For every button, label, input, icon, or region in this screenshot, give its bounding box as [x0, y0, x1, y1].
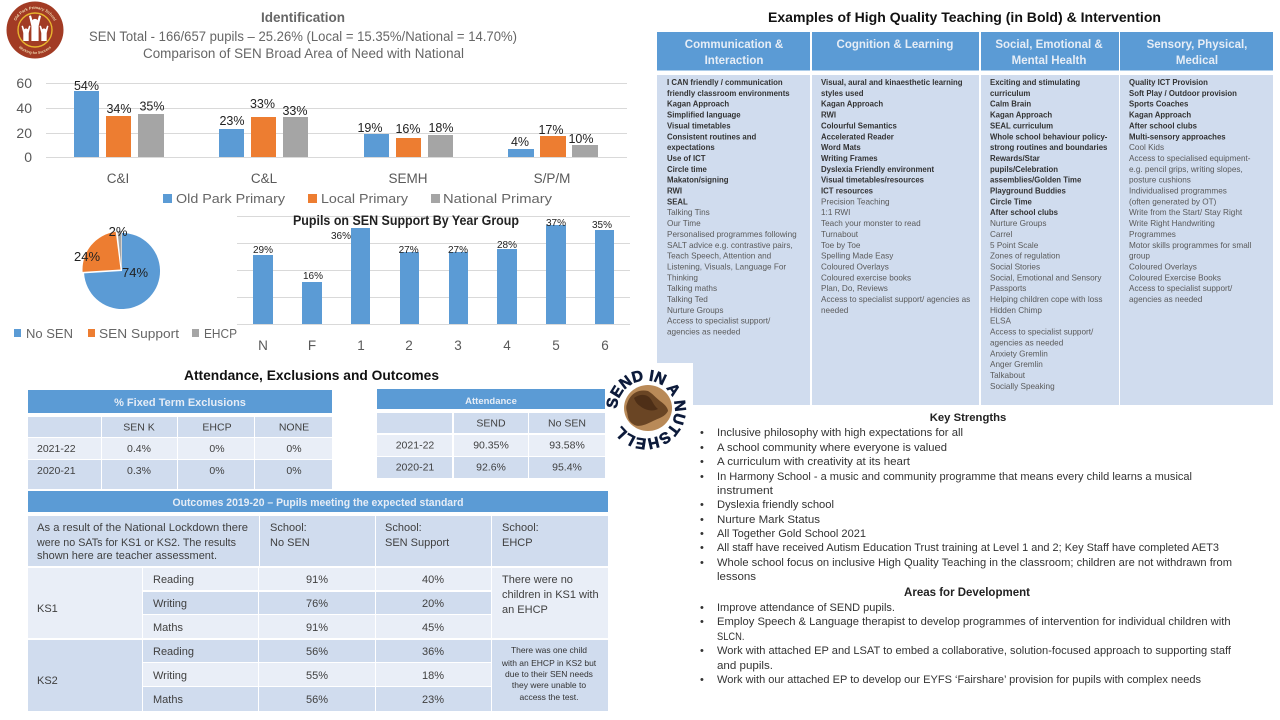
column: social emotional and mental health: Talkabout: [990, 371, 1026, 380]
list: strengths: instrument: [717, 485, 773, 497]
column: communication and interaction: agencies as needed: [667, 328, 741, 337]
column: cognition and learning: Accelerated Reader: [821, 132, 894, 141]
bar chart: pupils on SEN support by year group: 27%: [448, 245, 468, 256]
list: strengths: [700, 427, 1232, 583]
table: outcomes 2019-20: 23%: [422, 694, 444, 706]
icon: school logo: [6, 2, 64, 58]
column: cognition and learning: Turnabout: [821, 230, 859, 239]
bar chart: SEN broad area of need: 33%: [250, 97, 275, 111]
bar chart: pupils on SEN support by year group: N: [258, 338, 268, 353]
list: strengths: lessons: [717, 571, 757, 583]
list: strengths: •: [700, 471, 704, 483]
table: outcomes 2019-20: There were no: [502, 574, 573, 586]
table: attendance: Attendance: [465, 396, 517, 407]
column: social emotional and mental health: Socially Speaking: [990, 382, 1055, 391]
column: sensory physical and medical: Write from the Start/ Stay Right: [1129, 208, 1243, 217]
list: development areas: Work with our attached EP to develop our EYFS ‘Fairshare’ provision for pupils with complex needs: [717, 674, 1201, 686]
column: cognition and learning: Coloured Overlays: [821, 262, 889, 271]
table: outcomes 2019-20: 91%: [306, 574, 328, 586]
list: development areas: Improve attendance of SEND pupils.: [717, 602, 895, 614]
column: communication and interaction: expectations: [667, 143, 715, 152]
column: cognition and learning: Dyslexia Friendly environment: [821, 165, 934, 174]
column: cognition and learning: Word Mats: [821, 143, 861, 152]
list: strengths: •: [700, 456, 704, 468]
heading: high quality teaching: Examples of High Quality Teaching (in Bold) & Intervention: [768, 9, 1161, 25]
table: outcomes 2019-20: SEN Support: [385, 537, 449, 549]
column: sensory physical and medical: posture cushions: [1129, 176, 1191, 185]
column: social emotional and mental health: curriculum: [990, 89, 1030, 98]
table: outcomes 2019-20: 55%: [306, 670, 328, 682]
bar chart: pupils on SEN support by year group: 36%: [331, 231, 351, 242]
bar chart: SEN broad area of need: 60: [16, 75, 32, 91]
list: development areas: and pupils.: [717, 660, 773, 672]
list: development areas: •: [700, 645, 704, 657]
bar chart: pupils on SEN support by year group: F: [308, 338, 316, 353]
column: social emotional and mental health: Whole school behaviour policy-: [990, 132, 1108, 141]
chart legend: Old Park Primary: [176, 191, 286, 206]
table: attendance: 92.6%: [476, 462, 506, 474]
table: outcomes 2019-20: 18%: [422, 670, 444, 682]
bar chart: SEN broad area of need: 20: [16, 125, 32, 141]
heading: identification: Comparison of SEN Broad Area of Need with National: [143, 46, 464, 61]
bar chart: pupils on SEN support by year group: 37%: [546, 218, 566, 229]
bar chart: SEN broad area of need: 17%: [538, 123, 564, 137]
column: sensory physical and medical: Cool Kids: [1129, 143, 1164, 152]
column: communication and interaction: Thinking: [667, 273, 698, 282]
chart legend: National Primary: [443, 191, 553, 206]
column: social emotional and mental health: Rewards/Star: [990, 154, 1040, 163]
table: outcomes 2019-20: 56%: [306, 694, 328, 706]
bar chart: SEN broad area of need: 18%: [428, 121, 454, 135]
table: outcomes 2019-20: Writing: [153, 670, 187, 682]
table: outcomes 2019-20: children in KS1 with: [502, 589, 599, 601]
pie legend: [14, 326, 237, 341]
pie legend: No SEN: [26, 326, 73, 341]
column: sensory physical and medical: e.g. pencil grips, writing slopes,: [1129, 165, 1243, 174]
column headers: Communication &: [685, 39, 783, 51]
column: communication and interaction: Access to specialist support/: [667, 317, 771, 326]
bar chart: SEN broad area of need: SEMH: [388, 171, 428, 186]
list: strengths: •: [700, 499, 704, 511]
column headers: Cognition & Learning: [837, 39, 953, 51]
list: strengths: •: [700, 528, 704, 540]
table: attendance: 2020-21: [396, 462, 434, 474]
table: outcomes 2019-20: There was one child: [511, 645, 587, 655]
table: attendance: 90.35%: [473, 440, 509, 452]
table: outcomes 2019-20: Maths: [153, 622, 183, 634]
column: cognition and learning: Toe by Toe: [821, 241, 861, 250]
table: outcomes 2019-20: School:: [270, 522, 307, 534]
column: cognition and learning: Spelling Made Easy: [821, 252, 894, 261]
bar chart: SEN broad area of need: S/P/M: [534, 171, 570, 186]
pie chart: SEN proportion: [14, 224, 237, 341]
table: outcomes 2019-20: 76%: [306, 598, 328, 610]
icon: school logo: Old Park Primary School: [14, 6, 56, 21]
icon: send in a nutshell badge: SEND IN A NUTSHELL: [606, 370, 686, 450]
bar chart: pupils on SEN support by year group: 35%: [592, 220, 612, 231]
table: outcomes 2019-20: [28, 491, 608, 711]
heading: identification: SEN Total - 166/657 pupils – 25.26% (Local = 15.35%/National = 14.70%): [89, 29, 517, 44]
list: strengths: Dyslexia friendly school: [717, 499, 834, 511]
bar chart: SEN broad area of need: 0: [24, 149, 32, 165]
list: development areas: •: [700, 616, 704, 628]
column: sensory physical and medical: Programmes: [1129, 230, 1176, 239]
column: communication and interaction: Use of ICT: [667, 154, 706, 163]
bar chart: SEN broad area of need: C&L: [251, 171, 278, 186]
column: sensory physical and medical: Access to specialist support/: [1129, 284, 1233, 293]
list: strengths: Inclusive philosophy with high expectations for all: [717, 427, 963, 439]
column: cognition and learning: 1:1 RWI: [821, 208, 850, 217]
table: attendance: [377, 389, 605, 478]
column: sensory physical and medical: group: [1129, 252, 1150, 261]
table: attendance: 2021-22: [396, 440, 434, 452]
chart legend: [163, 191, 553, 206]
column: social emotional and mental health: Carrel: [990, 230, 1012, 239]
list: strengths: •: [700, 514, 704, 526]
column: social emotional and mental health: Passports: [990, 284, 1026, 293]
column: communication and interaction: Simplified language: [667, 111, 741, 120]
table: outcomes 2019-20: As a result of the National Lockdown there: [37, 522, 248, 534]
table: outcomes 2019-20: School:: [385, 522, 422, 534]
column: cognition and learning: RWI: [821, 111, 836, 120]
table: fixed term exclusions: SEN K: [123, 422, 155, 434]
list: development areas: SLCN.: [717, 631, 744, 643]
list: development areas: [700, 602, 1232, 686]
table: outcomes 2019-20: Reading: [153, 646, 194, 658]
table: outcomes 2019-20: 45%: [422, 622, 444, 634]
column: cognition and learning: Teach your monster to read: [821, 219, 921, 228]
bar chart: SEN broad area of need: 54%: [74, 79, 99, 93]
pie legend: SEN Support: [99, 326, 179, 341]
bar chart: SEN broad area of need: 33%: [282, 104, 308, 118]
table: outcomes 2019-20: 20%: [422, 598, 444, 610]
table: outcomes 2019-20: they were unable to: [512, 680, 586, 690]
column: cognition and learning: Coloured exercise books: [821, 273, 911, 282]
list: strengths: •: [700, 557, 704, 569]
pie chart: SEN proportion: 24%: [74, 249, 100, 264]
table: fixed term exclusions: % Fixed Term Exclusions: [114, 397, 246, 409]
list: strengths: Nurture Mark Status: [717, 514, 821, 526]
column: sensory physical and medical: Sports Coaches: [1129, 100, 1189, 109]
column: cognition and learning: Writing Frames: [821, 154, 878, 163]
bar chart: SEN broad area of need: 35%: [139, 100, 165, 114]
list: strengths: •: [700, 442, 704, 454]
column: sensory physical and medical: After school clubs: [1129, 121, 1198, 130]
column headers: [657, 32, 1273, 70]
column: sensory physical and medical: Individualised programmes: [1129, 186, 1227, 196]
column: social emotional and mental health: Anger Gremlin: [990, 360, 1043, 369]
column: social emotional and mental health: strong routines and boundaries: [990, 143, 1108, 152]
column: cognition and learning: Access to specialist support/ agencies as: [821, 295, 970, 304]
list: strengths: A school community where everyone is valued: [717, 442, 947, 454]
bar chart: SEN broad area of need: 40: [16, 100, 32, 116]
table: outcomes 2019-20: Reading: [153, 574, 194, 586]
bar chart: pupils on SEN support by year group: 5: [552, 338, 560, 353]
column: cognition and learning: styles used: [821, 89, 864, 98]
table: attendance: No SEN: [548, 418, 586, 430]
column: communication and interaction: RWI: [667, 186, 682, 196]
column: communication and interaction: Circle time: [667, 165, 708, 174]
table: outcomes 2019-20: 56%: [306, 646, 328, 658]
column: communication and interaction: Talking Ted: [667, 295, 708, 304]
column: sensory physical and medical: agencies as needed: [1129, 295, 1203, 304]
column headers: Social, Emotional &: [995, 39, 1103, 51]
column headers: Interaction: [705, 55, 763, 67]
bar chart: pupils on SEN support by year group: 6: [601, 338, 609, 353]
table: outcomes 2019-20: access the test.: [519, 692, 579, 702]
column: cognition and learning: needed: [821, 306, 849, 315]
column: social emotional and mental health: Helping children cope with loss: [990, 295, 1102, 304]
column: communication and interaction: SEAL: [667, 197, 688, 206]
column: social emotional and mental health: Access to specialist support/: [990, 328, 1094, 337]
column: communication and interaction: Visual timetables: [667, 121, 731, 130]
column: social emotional and mental health: pupils/Celebration: [990, 165, 1058, 174]
table: fixed term exclusions: 0%: [286, 443, 302, 455]
table: outcomes 2019-20: School:: [502, 522, 539, 534]
icon: school logo: Working for Success: [19, 46, 51, 54]
bar chart: pupils on SEN support by year group: Pupils on SEN Support By Year Group: [293, 213, 519, 228]
table: outcomes 2019-20: due to their SEN needs: [505, 669, 593, 679]
list: strengths: In Harmony School - a music and community programme that means every child learns a musical: [717, 471, 1192, 483]
column headers: Medical: [1176, 55, 1218, 67]
table: outcomes 2019-20: EHCP: [502, 537, 533, 549]
table: fixed term exclusions: 0.4%: [127, 443, 151, 455]
column: social emotional and mental health: agencies as needed: [990, 338, 1064, 347]
table: outcomes 2019-20: 40%: [422, 574, 444, 586]
column: communication and interaction: Talking Tins: [667, 208, 710, 217]
column: social emotional and mental health: Anxiety Gremlin: [990, 349, 1048, 358]
column: sensory physical and medical: Kagan Approach: [1129, 111, 1191, 120]
table: attendance: 95.4%: [552, 462, 582, 474]
table: fixed term exclusions: 0%: [209, 443, 225, 455]
table: outcomes 2019-20: Outcomes 2019-20 – Pupils meeting the expected standard: [172, 497, 464, 509]
table: fixed term exclusions: EHCP: [202, 422, 232, 434]
table: fixed term exclusions: 2021-22: [37, 443, 76, 455]
table: fixed term exclusions: 2020-21: [37, 465, 76, 477]
column: cognition and learning: Visual, aural and kinaesthetic learning: [821, 78, 963, 87]
list: strengths: Whole school focus on inclusive High Quality Teaching in the classroom; children are not withdrawn from: [717, 557, 1232, 569]
table: attendance: SEND: [476, 418, 506, 430]
table: attendance: 93.58%: [549, 440, 585, 452]
column: social emotional and mental health: Zones of regulation: [990, 252, 1061, 261]
chart legend: Local Primary: [321, 191, 409, 206]
column: social emotional and mental health: Playground Buddies: [990, 186, 1066, 196]
column: communication and interaction: Listening, Visuals, Language For: [667, 262, 786, 271]
list: development areas: Employ Speech & Language therapist to develop programmes of intervention for individual children with: [717, 616, 1231, 628]
panel: key strengths: Key Strengths: [930, 412, 1006, 424]
column headers: Sensory, Physical,: [1147, 39, 1247, 51]
panel: teaching table: [657, 32, 1273, 405]
bar chart: SEN broad area of need: 23%: [219, 114, 245, 128]
column: sensory physical and medical: (often generated by OT): [1129, 197, 1217, 206]
column: communication and interaction: I CAN friendly / communication: [667, 78, 783, 87]
list: strengths: All Together Gold School 2021: [717, 528, 866, 540]
list: development areas: Work with attached EP and LSAT to embed a collaborative, solution-focused approach to supporting staff: [717, 645, 1232, 657]
heading: attendance exclusions outcomes: Attendance, Exclusions and Outcomes: [184, 368, 439, 383]
column: social emotional and mental health: Nurture Groups: [990, 219, 1046, 228]
bar chart: pupils on SEN support by year group: 3: [454, 338, 462, 353]
table: fixed term exclusions: 0.3%: [127, 465, 151, 477]
column: sensory physical and medical: Write Right Handwriting: [1129, 219, 1215, 228]
column: cognition and learning: ICT resources: [821, 186, 874, 196]
column: communication and interaction: Talking maths: [667, 284, 717, 293]
column: social emotional and mental health: Social, Emotional and Sensory: [990, 273, 1102, 282]
bar chart: SEN broad area of need: 34%: [106, 102, 132, 116]
column: social emotional and mental health: 5 Point Scale: [990, 241, 1039, 250]
pie chart: SEN proportion: 74%: [122, 265, 148, 280]
table: outcomes 2019-20: an EHCP: [502, 604, 548, 616]
bar chart: SEN broad area of need: [16, 75, 627, 206]
bar chart: pupils on SEN support by year group: 2: [405, 338, 413, 353]
bar chart: SEN broad area of need: 19%: [357, 121, 383, 135]
bar chart: pupils on SEN support by year group: 29%: [253, 245, 273, 256]
list: strengths: •: [700, 427, 704, 439]
table: outcomes 2019-20: Writing: [153, 598, 187, 610]
bar chart: pupils on SEN support by year group: [237, 213, 630, 353]
column: communication and interaction: Teach Speech, Attention and: [667, 252, 772, 261]
column: cognition and learning: Colourful Semantics: [821, 121, 897, 130]
panel: areas for development: Areas for Development: [904, 587, 1030, 599]
table: fixed term exclusions: 0%: [286, 465, 302, 477]
column: cognition and learning: Kagan Approach: [821, 100, 883, 109]
column: social emotional and mental health: ELSA: [990, 317, 1011, 326]
table: outcomes 2019-20: 91%: [306, 622, 328, 634]
bar chart: pupils on SEN support by year group: 28%: [497, 240, 517, 251]
table: outcomes 2019-20: with an EHCP in KS2 but: [501, 658, 597, 668]
list: strengths: All staff have received Autism Education Trust training at Level 1 and 2; Key Staff have completed AET3: [717, 542, 1219, 554]
column: sensory physical and medical: Motor skills programmes for small: [1129, 241, 1252, 250]
list: strengths: •: [700, 542, 704, 554]
pie legend: EHCP: [204, 326, 237, 341]
bar chart: SEN broad area of need: C&I: [107, 171, 129, 186]
column: communication and interaction: Consistent routines and: [667, 132, 756, 141]
column: cognition and learning: Precision Teaching: [821, 197, 890, 206]
column: social emotional and mental health: Circle Time: [990, 197, 1033, 206]
column: social emotional and mental health: SEAL curriculum: [990, 121, 1053, 130]
table: fixed term exclusions: [28, 390, 332, 489]
column: communication and interaction: friendly classroom environments: [667, 89, 790, 98]
column: social emotional and mental health: After school clubs: [990, 208, 1059, 217]
column: communication and interaction: Makaton/signing: [667, 176, 729, 185]
column: social emotional and mental health: Calm Brain: [990, 100, 1031, 109]
bar chart: SEN broad area of need: 10%: [568, 132, 594, 146]
table: outcomes 2019-20: KS2: [37, 675, 58, 687]
column: communication and interaction: Kagan Approach: [667, 100, 729, 109]
column: communication and interaction: Nurture Groups: [667, 306, 723, 315]
column: social emotional and mental health: assemblies/Golden Time: [990, 176, 1082, 185]
list: development areas: •: [700, 674, 704, 686]
column: cognition and learning: Plan, Do, Reviews: [821, 284, 888, 293]
table: outcomes 2019-20: No SEN: [270, 537, 310, 549]
panel: areas for development: [700, 587, 1232, 686]
column: communication and interaction: Our Time: [667, 219, 701, 228]
column: sensory physical and medical: Soft Play / Outdoor provision: [1129, 89, 1237, 98]
table: outcomes 2019-20: Maths: [153, 694, 183, 706]
column: communication and interaction: Personalised programmes following: [667, 230, 797, 239]
table: fixed term exclusions: NONE: [279, 422, 309, 434]
table: outcomes 2019-20: shown here are teacher assessment.: [37, 550, 217, 562]
bar chart: pupils on SEN support by year group: 4: [503, 338, 511, 353]
column: social emotional and mental health: Exciting and stimulating: [990, 78, 1080, 87]
table: outcomes 2019-20: 36%: [422, 646, 444, 658]
column: sensory physical and medical: Multi-sensory approaches: [1129, 132, 1226, 141]
pie chart: SEN proportion: 2%: [109, 224, 128, 239]
heading: identification: [89, 10, 517, 61]
column: sensory physical and medical: Coloured Overlays: [1129, 262, 1197, 271]
column headers: Mental Health: [1012, 55, 1086, 67]
column: cognition and learning: Visual timetables/resources: [821, 176, 925, 185]
column: communication and interaction: SALT advice e.g. contrastive pairs,: [667, 241, 793, 250]
table: outcomes 2019-20: KS1: [37, 603, 58, 615]
heading: identification: Identification: [261, 10, 345, 25]
list: strengths: A curriculum with creativity at its heart: [717, 456, 910, 468]
table: outcomes 2019-20: were no SATs for KS1 or KS2. The results: [36, 537, 236, 549]
column: social emotional and mental health: Hidden Chimp: [990, 306, 1042, 315]
bar chart: pupils on SEN support by year group: 27%: [399, 245, 419, 256]
list: development areas: •: [700, 602, 704, 614]
panel: key strengths: [700, 412, 1232, 583]
bar chart: pupils on SEN support by year group: 16%: [303, 271, 323, 282]
bar chart: SEN broad area of need: 4%: [511, 135, 529, 149]
bar chart: pupils on SEN support by year group: 1: [357, 338, 365, 353]
column: social emotional and mental health: Social Stories: [990, 262, 1040, 271]
table: fixed term exclusions: 0%: [209, 465, 225, 477]
column: sensory physical and medical: Quality ICT Provision: [1129, 78, 1208, 87]
column: social emotional and mental health: Kagan Approach: [990, 111, 1052, 120]
column: sensory physical and medical: Access to specialised equipment-: [1129, 154, 1251, 163]
bar chart: SEN broad area of need: 16%: [395, 122, 421, 136]
column: sensory physical and medical: Coloured Exercise Books: [1129, 273, 1221, 282]
